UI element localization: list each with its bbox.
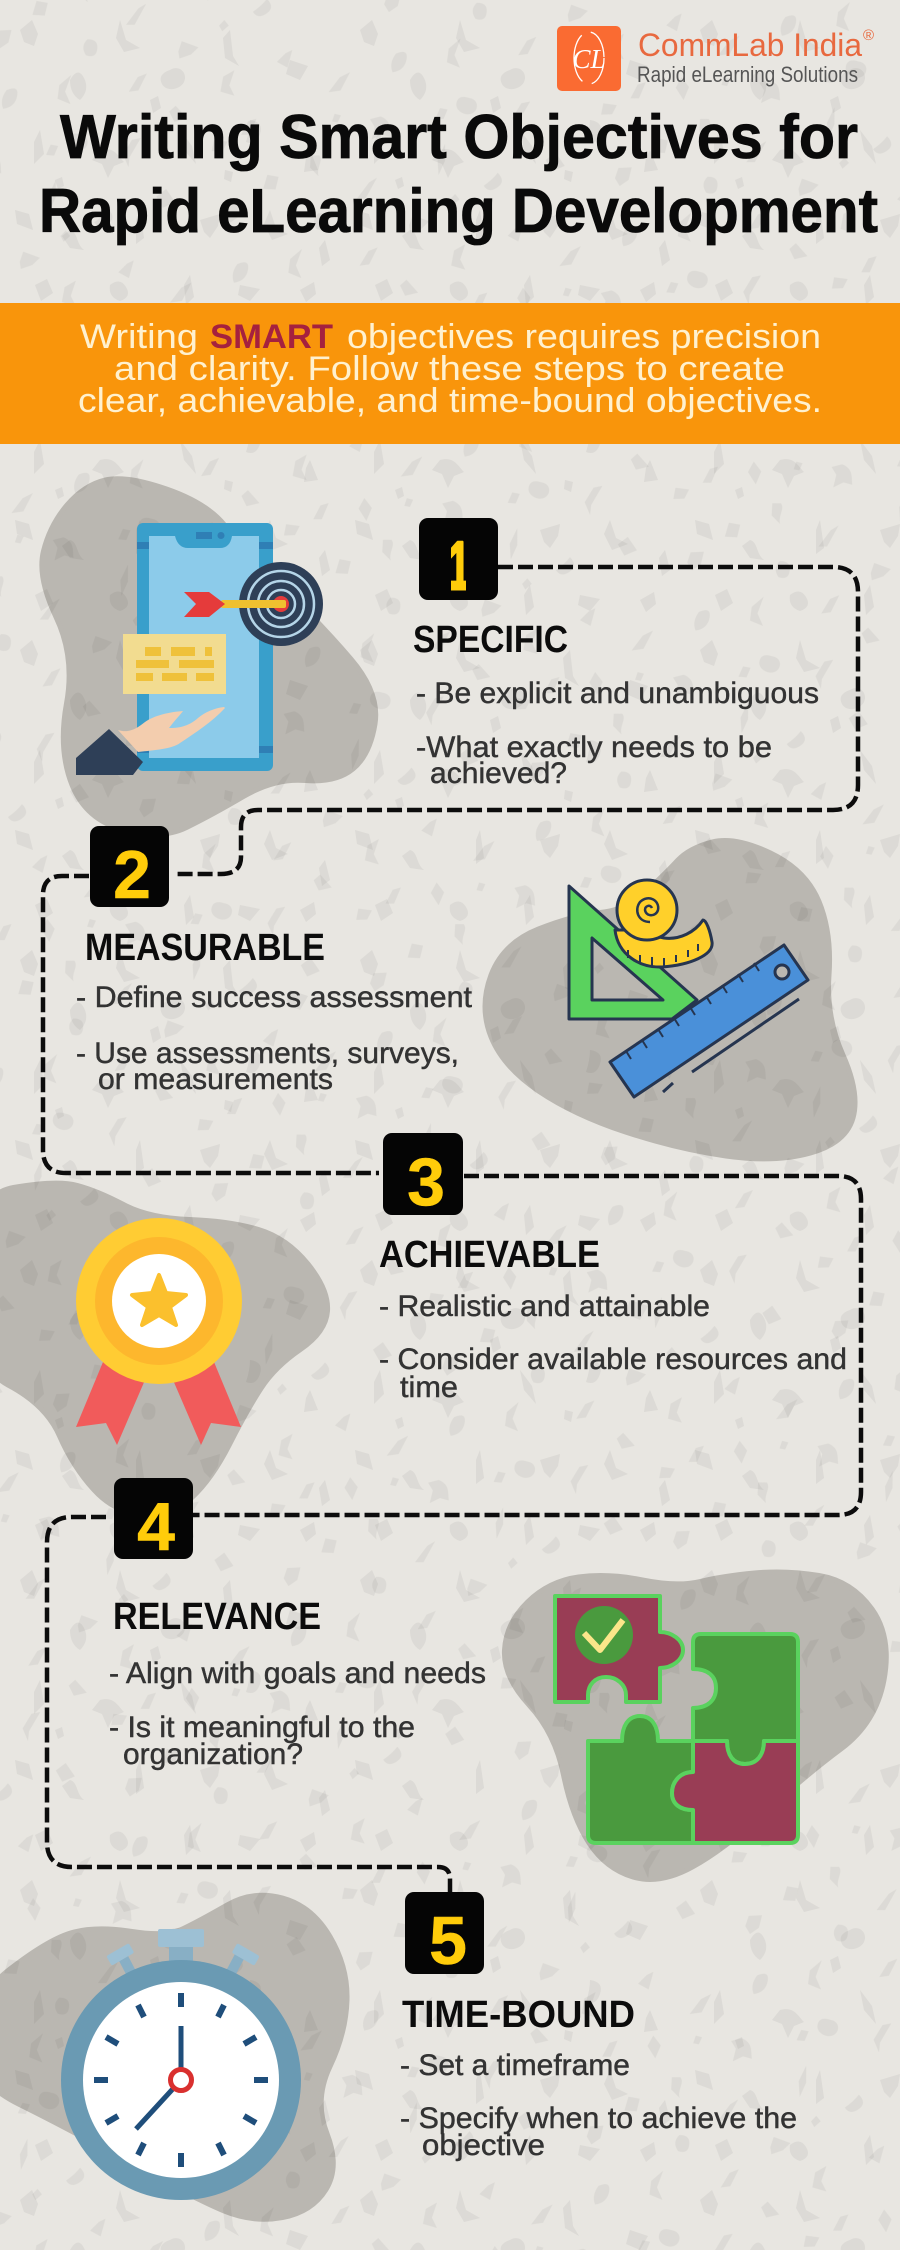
- blob: step 4 backdrop: [504, 1572, 886, 1879]
- arrow: [184, 592, 286, 617]
- intro text: objectives requires precision: [347, 318, 821, 356]
- bullets: relevance: [109, 1657, 486, 1771]
- set square: [569, 886, 697, 1019]
- bullets: relevance: - Align with goals and needs: [109, 1657, 486, 1690]
- bullets: time-bound: - Specify when to achieve the: [400, 2102, 797, 2135]
- badge: step 4: [114, 1478, 193, 1565]
- bullets: measurable: - Use assessments, surveys,: [76, 1037, 459, 1070]
- step 5 text: [400, 1994, 797, 2162]
- logo: [557, 26, 874, 91]
- icon: puzzle: [555, 1596, 798, 1843]
- stopwatch body: [61, 1960, 301, 2200]
- puzzle piece bottom right: [672, 1741, 798, 1843]
- bullets: achievable: [379, 1290, 847, 1404]
- bullets: specific: achieved?: [430, 757, 567, 790]
- bullets: achievable: time: [400, 1371, 458, 1404]
- step 3 text: [379, 1234, 847, 1404]
- heading: specific: SPECIFIC: [413, 619, 568, 661]
- stopwatch centre: [170, 2070, 192, 2090]
- phone: [137, 523, 273, 771]
- heading: time-bound: TIME-BOUND: [402, 1994, 635, 2036]
- note card: [123, 634, 226, 694]
- heading: measurable: MEASURABLE: [85, 927, 325, 969]
- bullets: achievable: - Realistic and attainable: [379, 1290, 710, 1323]
- stopwatch hands: [136, 2026, 181, 2129]
- dashed connector path: [43, 567, 861, 1892]
- intro text: SMART: [210, 318, 333, 356]
- heading: achievable: ACHIEVABLE: [379, 1234, 600, 1276]
- stopwatch crown: [106, 1929, 260, 1978]
- measuring tape: [615, 880, 712, 967]
- blob: step 2 backdrop: [485, 840, 855, 1159]
- bullets: relevance: - Is it meaningful to the: [109, 1711, 415, 1744]
- badge: step 5: 5: [429, 1903, 467, 1979]
- blob: step 1 backdrop: [42, 479, 376, 834]
- hand: [76, 707, 225, 775]
- icon: medal: [76, 1218, 242, 1445]
- badge: step 5: [405, 1892, 484, 1979]
- bullets: measurable: - Define success assessment: [76, 981, 473, 1014]
- badge: step 1: [419, 518, 498, 604]
- star: [132, 1275, 186, 1325]
- step 2 text: [76, 927, 473, 1096]
- logo tagline: Rapid eLearning Solutions: [637, 62, 858, 87]
- bullets: achievable: - Consider available resources and: [379, 1343, 847, 1376]
- bullets: relevance: organization?: [123, 1738, 303, 1771]
- blob: step 3 backdrop: [0, 1183, 328, 1515]
- intro banner: [0, 303, 900, 444]
- blob: step 5 backdrop: [0, 1895, 347, 2219]
- heading: relevance: RELEVANCE: [113, 1596, 321, 1638]
- intro text: Writing: [80, 318, 198, 356]
- bullets: specific: - Be explicit and unambiguous: [416, 677, 819, 710]
- badge: step 3: 3: [407, 1144, 445, 1220]
- icon: phone with target and hand: [76, 523, 323, 775]
- badge: step 2: [90, 826, 169, 913]
- ruler: [610, 945, 808, 1097]
- step 1 text: [413, 619, 819, 790]
- bullets: specific: [416, 677, 819, 790]
- icon: set square, tape and ruler: [569, 880, 808, 1097]
- bullets: time-bound: - Set a timeframe: [400, 2049, 630, 2082]
- intro text: [78, 318, 822, 420]
- ribbons: [76, 1362, 241, 1445]
- intro text: clear, achievable, and time-bound objectives.: [78, 382, 822, 420]
- bullets: specific: -What exactly needs to be: [416, 731, 772, 764]
- stopwatch ticks: [94, 1993, 268, 2167]
- check circle: [575, 1606, 633, 1664]
- registered mark: ®: [863, 27, 874, 44]
- bullets: measurable: [76, 981, 473, 1096]
- badge: step 1: 1: [448, 528, 470, 604]
- icon: stopwatch: [61, 1929, 301, 2200]
- medal disc: [76, 1218, 242, 1384]
- title: Writing Smart Objectives for: [60, 103, 858, 172]
- badge: step 2: 2: [113, 837, 151, 913]
- bullets: time-bound: [400, 2049, 797, 2162]
- intro text: and clarity. Follow these steps to create: [114, 350, 785, 388]
- logo wordmark: CommLab India: [638, 27, 862, 63]
- title: [39, 103, 878, 246]
- bullets: time-bound: objective: [422, 2129, 545, 2162]
- target: [239, 562, 323, 646]
- badge: step 4: 4: [137, 1489, 175, 1565]
- puzzle piece bottom left: [588, 1716, 693, 1843]
- bullets: measurable: or measurements: [98, 1063, 333, 1096]
- puzzle piece top left: [555, 1596, 683, 1702]
- logo mark: CL: [572, 44, 606, 74]
- logo mark: [557, 26, 621, 91]
- step 4 text: [109, 1596, 486, 1771]
- stopwatch face: [83, 1982, 279, 2178]
- badge: step 3: [383, 1133, 463, 1220]
- puzzle piece top right: [693, 1634, 798, 1764]
